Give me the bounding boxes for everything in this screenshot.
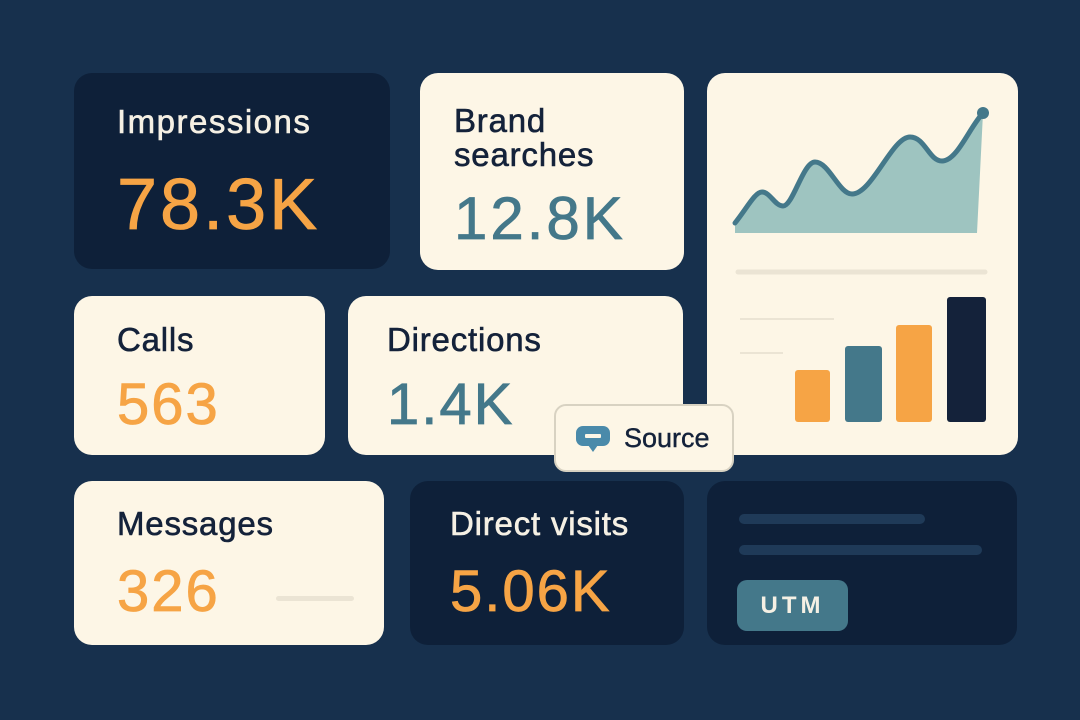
label: direct visits: Direct visits (450, 505, 629, 542)
label: brand searches: searches (454, 136, 594, 173)
value: messages: 326 (117, 559, 220, 624)
card: directions (348, 296, 683, 455)
label: calls: Calls (117, 321, 194, 358)
label: messages: Messages (117, 505, 274, 542)
callout: source (554, 404, 734, 472)
icon: speech bubble (576, 426, 610, 452)
badge: utm: UTM (760, 592, 824, 619)
area chart (735, 107, 989, 233)
card: utm (707, 481, 1017, 645)
value: impressions: 78.3K (117, 165, 320, 245)
card: direct visits (410, 481, 684, 645)
label: brand searches (454, 102, 594, 173)
value: direct visits: 5.06K (450, 559, 612, 624)
value: calls: 563 (117, 372, 220, 437)
value: directions: 1.4K (387, 372, 514, 437)
label: directions: Directions (387, 321, 542, 358)
card: brand searches (420, 73, 684, 270)
label: brand searches: Brand (454, 102, 546, 139)
chart: area and bars (732, 107, 989, 422)
bar chart (795, 297, 986, 422)
card: chart (707, 73, 1018, 455)
card: messages (74, 481, 384, 645)
card: impressions (74, 73, 390, 269)
badge: utm (737, 580, 848, 631)
label: source: Source (624, 423, 710, 453)
card: calls (74, 296, 325, 455)
label: impressions: Impressions (117, 103, 311, 140)
value: brand searches: 12.8K (454, 185, 626, 252)
